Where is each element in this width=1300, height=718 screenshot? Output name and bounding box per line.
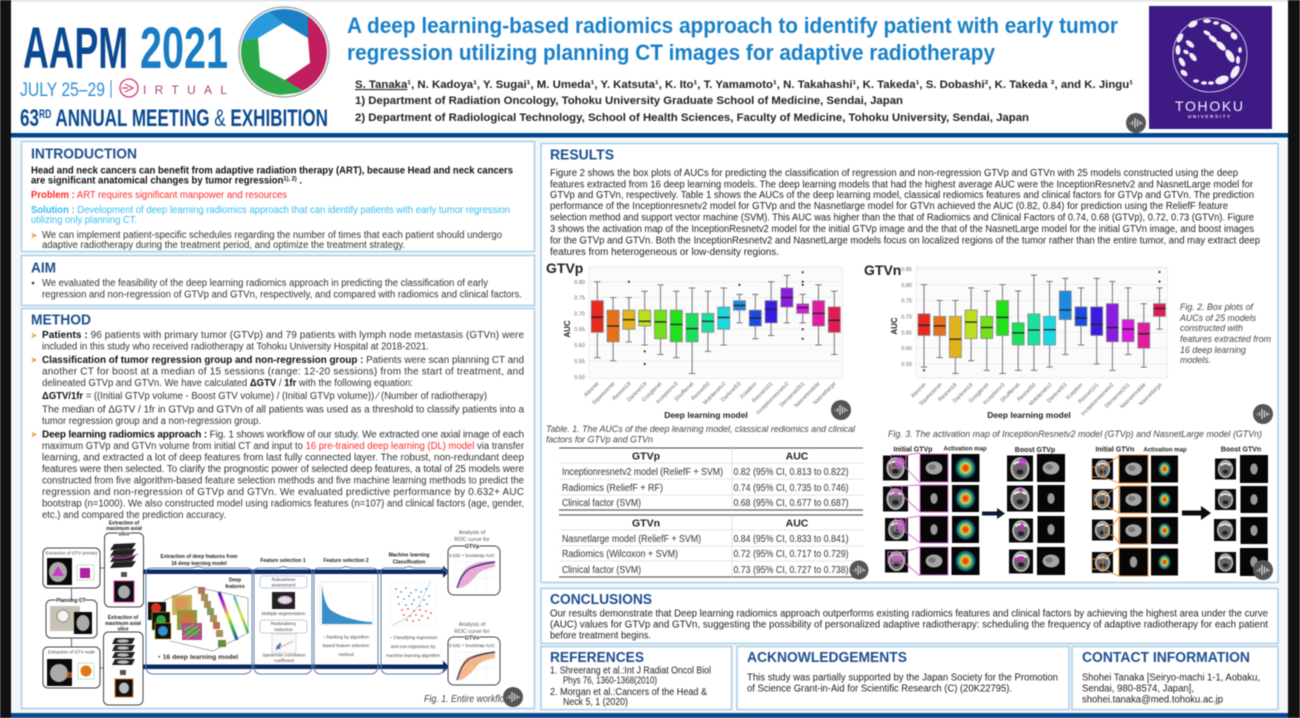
results text: performance of the Inceptionresnetv2 model for GTVp and the Nasnetlarge model for GTVn achieved the AUC (0.82, 0.84) for prediction using the ReliefF feature: [550, 201, 1228, 212]
AAPM 2021 wordmark: 63: [20, 105, 47, 132]
method text: constructed from five algorithm-based feature selection methods and five machine learning methods to predict the: [42, 476, 524, 486]
method text: delineated GTVp and GTVn. We have calculated ΔGTV / 1fr with the following equation:: [42, 378, 413, 389]
box plot: GTVn: Inceptionresnetv2: [1080, 382, 1115, 417]
Tohoku University logo: UNIVERSITY: [1188, 114, 1230, 119]
workflow: ROC analysis GTVn: ROC curve for: [454, 629, 490, 635]
workflow: ROC analysis GTVp: GTVp: [465, 544, 480, 550]
box plot: GTVn: Resnet18: [938, 382, 958, 403]
method text: etc.) and compared the prediction accuracy.: [42, 510, 226, 521]
heading: results: RESULTS: [550, 146, 614, 164]
table: GTVp AUC: Radiomics (ReliefF + RF): [562, 483, 663, 494]
method text: [31, 330, 525, 521]
method text: included in this study who received radiotherapy at Tohoku University Hospital at 2018-2021.: [42, 342, 429, 352]
figure 2 caption: models.: [1180, 355, 1211, 366]
method text: regression and non-regression of GTVp and GTVn. We evaluated predictive performance by 0.632+ AUC: [42, 487, 524, 498]
poster title: A deep learning-based radiomics approach to identify patient with early tumor: [347, 13, 1118, 38]
method text: Deep learning radiomics approach : Fig. 1 shows workflow of our study. We extracted one axial image of each: [42, 430, 524, 440]
heading: aim: AIM: [31, 260, 56, 276]
column labels: [894, 446, 1261, 454]
panel: references: [541, 646, 732, 710]
contact text: [1082, 672, 1260, 706]
box plot: GTVp: 0.75: [574, 296, 585, 302]
acknowledgements text: [747, 672, 1058, 694]
box plot: GTVn: Squeezenet: [918, 382, 944, 407]
references list: Phys 76, 1360-1368(2010): [563, 676, 657, 686]
references list: Neck 5, 1 (2020): [563, 697, 628, 708]
workflow: maximum axial slice boxes: maximum axial: [106, 526, 143, 532]
workflow: deep feature collage: [148, 578, 248, 661]
results text: for the GTVp and GTVn. Both the InceptionResnetv2 and NasnetLarge models focus on localized regions of the tumor rather than the entire tumor, and may extract deep: [550, 236, 1260, 246]
method text: Patients : 96 patients with primary tumor (GTVp) and 79 patients with lymph node metastasis (GTVn) were: [42, 330, 524, 341]
poster title: [347, 13, 1118, 65]
box plot: GTVn: 0.55: [901, 362, 912, 368]
conclusions text: Our results demonstrate that Deep learning radiomics approach outperforms existing radiomics features and clinical factors by achieving the highest area under the curve: [550, 608, 1268, 620]
workflow: input CT boxes: Extraction of GTV node: [48, 650, 95, 654]
workflow: feature ranking chart: method: [338, 652, 354, 657]
right black bar: [1288, 0, 1300, 718]
audio badge: header: [1126, 113, 1146, 133]
table 1 caption: Table. 1. The AUCs of the deep learning model, classical rediomics and clinical: [546, 424, 856, 435]
box plot: GTVn: 0.80: [901, 283, 912, 289]
workflow: feature selection 1: reduction: [274, 627, 293, 632]
box plot: GTVn: Shufflenet: [1000, 382, 1022, 404]
workflow: feature selection 1: Multiple segmentation: [262, 611, 306, 616]
box plot: GTVp: Mobilenetv2: [702, 381, 727, 406]
box plot: GTVp: Resnet50: [691, 381, 711, 402]
table 1 caption: [546, 424, 856, 446]
box plot: GTVn: Googlenet: [968, 382, 991, 404]
box plot: GTVp: Densenet201: [779, 381, 806, 409]
box plot: GTVn: Nasnetlarge: [1138, 382, 1163, 407]
figure 1: workflow diagram: [43, 520, 512, 705]
GTVp image grid: [883, 453, 1065, 576]
acknowledgements text: This study was partially supported by the Japan Society for the Promotion: [747, 672, 1058, 684]
workflow: classification scatter: machine learning algorithm: [386, 653, 440, 658]
column labels: Activation map: [1143, 448, 1187, 454]
AAPM 2021 wordmark: JULY 25–29: [20, 80, 105, 101]
box plot: GTVp: Resnet101: [751, 381, 774, 404]
workflow: maximum axial slice boxes: Extraction of: [108, 615, 139, 621]
column labels: Boost GTVn: [1221, 446, 1261, 454]
conclusions text: before treatment begins.: [550, 630, 651, 642]
references list: [550, 666, 711, 708]
box plot: GTVn: Mobilenetv2: [1028, 382, 1053, 407]
column labels: Initial GTVn: [1096, 446, 1134, 454]
panel: contact information: [1072, 646, 1278, 710]
heading: conclusions: CONCLUSIONS: [550, 592, 652, 608]
method text: learning, and extracted a lot of deep features from last fully connected layer. The robust, non-redundant deep: [42, 452, 524, 464]
aim text: regression and non-regression of GTVp and GTVn, respectively, and compared with radiomics and clinical factors.: [42, 290, 522, 300]
workflow: feature selection 1: Redundancy: [271, 621, 297, 626]
audio badge: GTVp chart: [831, 400, 851, 420]
table: GTVn AUC: [559, 515, 863, 577]
workflow: feature ranking chart: based feature selection: [323, 643, 370, 648]
AAPM hexagon logo: [238, 6, 330, 98]
workflow: feature selection 1: coefficient: [274, 658, 295, 663]
arrow: GTVp initial to boost: [982, 508, 1005, 519]
figure 2 caption: constructed with: [1180, 323, 1243, 334]
heading: contact information: CONTACT INFORMATION: [1082, 650, 1250, 666]
method text: bootstrap (n=1000). We also constructed model using radiomics features (n=107) and clinical factors (age, gender,: [42, 498, 524, 510]
figure 2 caption: [1179, 302, 1271, 366]
results text: selection method and support vector machine (SVM). This AUC was higher than the that of Radiomics and Clinical Factors of 0.74, 0.68 (GTVp), 0.72, 0.73 (GTVn). Figure: [550, 212, 1254, 224]
workflow: step headings: Feature selection 2: [323, 558, 369, 564]
method text: The median of ΔGTV / 1fr in GTVp and GTVn of all patients was used as a threshold to classify patients into a: [42, 404, 524, 416]
intro text: [31, 166, 513, 251]
box plot: GTVn: Inceptionv3: [982, 382, 1006, 406]
box plot: GTVn: 0.65: [901, 330, 912, 336]
panel: acknowledgements: [737, 646, 1069, 710]
box plot: GTVp: Inceptionv3: [655, 381, 679, 405]
acknowledgements text: of Science Grant-in-Aid for Scientific Research (C) (20K22795).: [747, 684, 1012, 694]
heading: introduction: INTRODUCTION: [31, 146, 137, 162]
conclusions text: (AUC) values for GTVp and GTVn, suggesting the possibility of personalized adaptive radiotherapy: scheduling the frequency of adaptive radiotherapy for each patient: [550, 620, 1268, 630]
method text: another CT for boost at a median of 15 sessions (range: 12-20 sessions) from the start of treatment, and: [42, 366, 524, 378]
figure 3 caption: Fig. 3. The activation map of InceptionResnetv2 model (GTVp) and NasnetLarge model (GTVn): [888, 429, 1262, 440]
AAPM 2021 wordmark: 2021: [140, 16, 228, 81]
workflow: deep feature collage: features: [225, 584, 245, 590]
authors and affiliations: S. Tanaka¹, N. Kadoya¹, Y. Sugai¹, M. Umeda¹, Y. Katsuta¹, K. Ito¹, T. Yamamoto¹, N. Takahashi¹, K. Takeda¹, S. Dobashi², K. Takeda ², and K. Jingu¹: [355, 79, 1133, 91]
method text: ΔGTV/1fr = ((Initial GTVp volume - Boost GTV volume) / (Initial GTVp volume)) ⁄ (Number of radiotherapy): [42, 391, 487, 402]
table: GTVp AUC: Clinical factor (SVM): [562, 498, 641, 509]
method text: Classification of tumor regression group and non-regression group : Patients were scan planning CT and: [42, 355, 524, 366]
workflow: input CT boxes: Planning CT: [56, 598, 86, 604]
audio badge: GTVn chart: [1253, 404, 1273, 424]
intro text: adaptive radiotherapy during the treatment period, and optimize the treatment strategy.: [42, 240, 405, 251]
column labels: Initial GTVp: [894, 446, 932, 454]
box plot: GTVp: Darknet53: [720, 381, 742, 403]
chart title: GTVp: GTVp: [546, 260, 583, 276]
box plot: GTVn: Deep learning model: [987, 410, 1071, 420]
box plot: GTVp: Deep learning model: [664, 410, 748, 420]
table: GTVp AUC: 0.74 (95% CI, 0.735 to 0.746): [734, 483, 848, 494]
box plot: GTVp: 0.50: [574, 375, 585, 381]
box plot: GTVn: AUC: [890, 317, 899, 335]
table: GTVn AUC: AUC: [786, 518, 809, 530]
box plot: GTVn: Darknet53: [1046, 382, 1068, 404]
results text: features from heterogeneous or low-density regions.: [550, 247, 779, 258]
panel: conclusions: [541, 588, 1278, 644]
workflow: step headings: [161, 552, 429, 567]
table: GTVp AUC: 0.82 (95% CI, 0.813 to 0.822): [734, 467, 848, 478]
workflow: classification scatter: [386, 582, 440, 658]
box plot: GTVp: [546, 260, 842, 420]
figure 2 caption: features extracted from: [1180, 334, 1271, 345]
box plot: GTVp: Nasnetlarge: [812, 381, 837, 406]
chart title: GTVn: GTVn: [864, 262, 901, 278]
Tohoku University logo: TOHOKU: [1175, 98, 1243, 114]
heading: references: REFERENCES: [550, 650, 644, 666]
audio badge: table: [850, 560, 868, 580]
table: GTVn AUC: Radiomics (Wilcoxon + SVM): [562, 549, 678, 560]
box plot: GTVp: Alexnet: [583, 381, 601, 398]
workflow: step headings: Feature selection 1: [260, 558, 306, 564]
bottom band: [11, 713, 1288, 718]
figure 2 caption: 16 deep learning: [1180, 345, 1247, 356]
box plot: GTVp: Nasnetmobile: [793, 381, 821, 409]
header band: [0, 0, 1300, 138]
method text: tumor regression group and a non-regression group.: [42, 416, 261, 427]
AAPM 2021 wordmark: ANNUAL MEETING: [51, 105, 214, 132]
workflow: feature ranking chart: ・Ranking by algorithm-: [322, 634, 371, 640]
results text: 3 shows the activation map of the InceptionResnetv2 model for the initial GTVp image and the that of the NasnetLarge model for the initial GTVn image, and boost images: [550, 224, 1254, 235]
intro text: Head and neck cancers can benefit from adaptive radiation therapy (ART), because Head and neck cancers: [31, 166, 513, 176]
table 1 caption: factors for GTVp and GTVn: [546, 434, 653, 446]
Tohoku University logo: [1149, 6, 1272, 129]
workflow: ROC analysis GTVn: Analysis of: [459, 622, 486, 628]
figure 1 caption: Fig. 1. Entire workflow: [424, 693, 512, 705]
results text: features extracted from 16 deep learning models. The deep learning models that had the highest average AUC were the InceptionResnetv2 and NasnetLarge model for: [550, 180, 1254, 190]
workflow: ROC analysis GTVn: 0.632 + bootstrap AUC: [449, 643, 496, 648]
arrow: GTVn initial to boost: [1182, 506, 1211, 520]
AAPM 2021 wordmark: [20, 16, 328, 132]
contact text: Shohei Tanaka [Seiryo-machi 1-1, Aobaku,: [1082, 672, 1260, 684]
table: GTVp AUC: AUC: [786, 450, 809, 462]
intro text: Solution : Development of deep learning radiomics approach that can identify patients with early tumor regression: [31, 205, 510, 216]
workflow: input CT boxes: Extraction of GTV primary: [46, 550, 98, 556]
workflow: step column brackets: [146, 566, 448, 674]
workflow: maximum axial slice boxes: [104, 520, 144, 705]
workflow: feature ranking chart: [320, 582, 373, 657]
AAPM 2021 wordmark: IRTUAL: [143, 83, 227, 97]
table: GTVp AUC: GTVp: [632, 450, 660, 462]
workflow: maximum axial slice boxes: Extraction of: [109, 520, 140, 526]
workflow: step headings: 16 deep learning model: [171, 561, 227, 567]
workflow: ROC analysis GTVp: 0.632 + bootstrap AUC: [449, 553, 496, 558]
box plot: GTVp: Xception: [739, 381, 758, 401]
heading: acknowledgements: ACKNOWLEDGEMENTS: [747, 650, 907, 666]
box plot: GTVn: [864, 262, 1167, 420]
box plot: GTVn: Xception: [1065, 382, 1084, 402]
workflow: ROC analysis GTVp: [448, 530, 500, 595]
table: GTVn AUC: 0.72 (95% CI, 0.717 to 0.729): [734, 549, 848, 560]
workflow: feature selection 1: [260, 576, 307, 663]
audio badge: figure 3: [1253, 560, 1273, 580]
workflow: feature selection 1: Spearman correlation: [262, 652, 306, 658]
AAPM 2021 wordmark: & EXHIBITION: [214, 105, 370, 132]
box plot: GTVn: 0.85: [901, 267, 912, 273]
workflow: ROC analysis GTVp: ROC curve for: [454, 537, 490, 543]
table: GTVp AUC: [559, 448, 863, 510]
table: GTVn AUC: 0.73 (95% CI, 0.727 to 0.738): [734, 565, 848, 576]
intro text: 1), 2): [283, 176, 297, 182]
box plot: GTVp: Shufflenet: [674, 381, 696, 403]
box plot: GTVn: Alexnet: [910, 382, 928, 399]
workflow: feature selection 1: Robustness: [272, 577, 296, 582]
box plot: GTVn: Nasnetmobile: [1119, 382, 1147, 410]
table: GTVn AUC: Clinical factor (SVM): [562, 565, 641, 576]
workflow: ROC analysis GTVn: [448, 622, 500, 685]
aim text: We evaluated the feasibility of the deep learning radiomics approach in predicting the classification of early: [42, 278, 488, 289]
intro text: Problem : ART requires significant manpower and resources: [31, 190, 287, 201]
box plot: GTVp: 0.80: [574, 280, 585, 286]
intro text: utilizing only planning CT.: [31, 215, 137, 226]
contact text: shohei.tanaka@med.tohoku.ac.jp: [1082, 694, 1223, 706]
GTVn image grid: [1092, 455, 1268, 576]
box plot: GTVp: Resnet18: [612, 381, 632, 402]
table: GTVp AUC: Inceptionresnetv2 model (ReliefF + SVM): [562, 467, 723, 478]
workflow: ROC analysis GTVn: GTVn: [465, 636, 480, 642]
workflow: classification scatter: ・Classifying regression: [389, 635, 438, 640]
box plot: GTVp: 0.65: [574, 327, 585, 333]
box plot: GTVp: Squeezenet: [591, 381, 617, 406]
contact text: Sendai, 980-8574, Japan],: [1082, 684, 1194, 694]
method text: features were then selected. To clarify the prognostic power of selected deep features, a total of 25 models were: [42, 464, 524, 475]
workflow: ROC analysis GTVp: Analysis of: [459, 530, 486, 536]
table: GTVp AUC: 0.68 (95% CI, 0.677 to 0.687): [734, 498, 848, 509]
results text: [550, 168, 1260, 258]
references list: 1. Shreerang et al.:Int J Radiat Oncol Biol: [550, 666, 711, 676]
authors and affiliations: [355, 79, 1133, 124]
table: GTVn AUC: Nasnetlarge model (ReliefF + SVM): [562, 534, 701, 545]
workflow: step headings: Classification: [393, 560, 425, 566]
heading: method: METHOD: [31, 312, 91, 328]
workflow: step headings: Machine learning: [389, 552, 429, 558]
intro text: We can implement patient-specific schedules regarding the number of times that each patient should undergo: [42, 230, 502, 241]
workflow: deep feature collage: ・16 deep learning model: [156, 654, 238, 661]
box plot: GTVn: Resnet50: [1017, 382, 1037, 403]
table: GTVn AUC: 0.84 (95% CI, 0.833 to 0.841): [734, 534, 848, 545]
box plot: GTVn: Darknet19: [952, 382, 974, 404]
figure 3: activation maps: [883, 429, 1268, 576]
AAPM 2021 wordmark: AAPM: [23, 16, 128, 81]
column labels: Activation map: [943, 446, 987, 452]
workflow: deep feature collage: Deep: [229, 578, 241, 584]
box plot: GTVp: Googlenet: [641, 381, 664, 403]
box plot: GTVp: Darknet19: [626, 381, 648, 403]
poster title: regression utilizing planning CT images for adaptive radiotherapy: [347, 40, 995, 65]
table: GTVn AUC: GTVn: [632, 518, 660, 530]
box plot: GTVp: 0.55: [574, 359, 585, 365]
workflow: step headings: Extraction of deep features from: [161, 554, 238, 560]
workflow: maximum axial slice boxes: maximum axial: [105, 621, 142, 627]
workflow: maximum axial slice boxes: slice: [117, 626, 129, 632]
panel: aim: [22, 256, 534, 306]
box plot: GTVp: Inceptionresnetv2: [755, 381, 790, 416]
aim text: [32, 278, 522, 300]
panel: introduction: [22, 142, 534, 252]
workflow: navy arrows: [143, 566, 449, 673]
box plot: GTVp: 0.60: [574, 343, 585, 349]
authors and affiliations: 2) Department of Radiological Technology, School of Health Sciences, Faculty of Medicine, Tohoku University, Sendai, Japan: [355, 112, 1029, 124]
results text: GTVp and GTVn, respectively. Table 1 shows the AUCs of the deep learning model, classical rediomics features and clinical factors for GTVp and GTVn. The prediction: [550, 190, 1254, 201]
box plot: GTVn: Densenet201: [1104, 382, 1131, 410]
box plot: GTVn: Resnet101: [1077, 382, 1100, 405]
column labels: Boost GTVp: [1015, 447, 1055, 454]
intro text: are significant anatomical changes by tumor regression: [31, 176, 297, 186]
AAPM 2021 wordmark: RD: [39, 107, 52, 121]
intro text: .: [297, 176, 302, 186]
box plot: GTVn: 0.70: [901, 314, 912, 320]
box plot: GTVn: 0.75: [901, 298, 912, 304]
workflow: input CT boxes: [43, 548, 104, 688]
box plot: GTVn: 0.60: [901, 346, 912, 352]
figure 2 caption: AUCs of 25 models: [1179, 313, 1256, 324]
audio badge: workflow: [503, 687, 523, 707]
box plot: GTVp: AUC: [563, 320, 572, 338]
conclusions text: [550, 608, 1268, 642]
workflow: feature selection 1: assessment: [271, 582, 296, 588]
left black bar: [0, 0, 11, 718]
box plot: GTVp: 0.70: [574, 312, 585, 318]
panel: method: [22, 308, 534, 708]
references list: 2. Morgan et al.:Cancers of the Head &: [550, 687, 707, 698]
authors and affiliations: 1) Department of Radiation Oncology, Tohoku University Graduate School of Medicine, Sendai, Japan: [355, 95, 903, 107]
figure 2 caption: Fig. 2. Box plots of: [1180, 302, 1254, 313]
panel: results: [541, 144, 1278, 582]
workflow: classification scatter: and non-regression by: [391, 644, 436, 649]
workflow: maximum axial slice boxes: slice: [118, 532, 130, 538]
results text: Figure 2 shows the box plots of AUCs for predicting the classification of regression and non-regression GTVp and GTVn with 25 models constructed using the deep: [550, 168, 1238, 179]
method text: maximum GTVp and GTVn volume from initial CT and input to 16 pre-trained deep learning (DL) model via transfer: [42, 441, 525, 452]
